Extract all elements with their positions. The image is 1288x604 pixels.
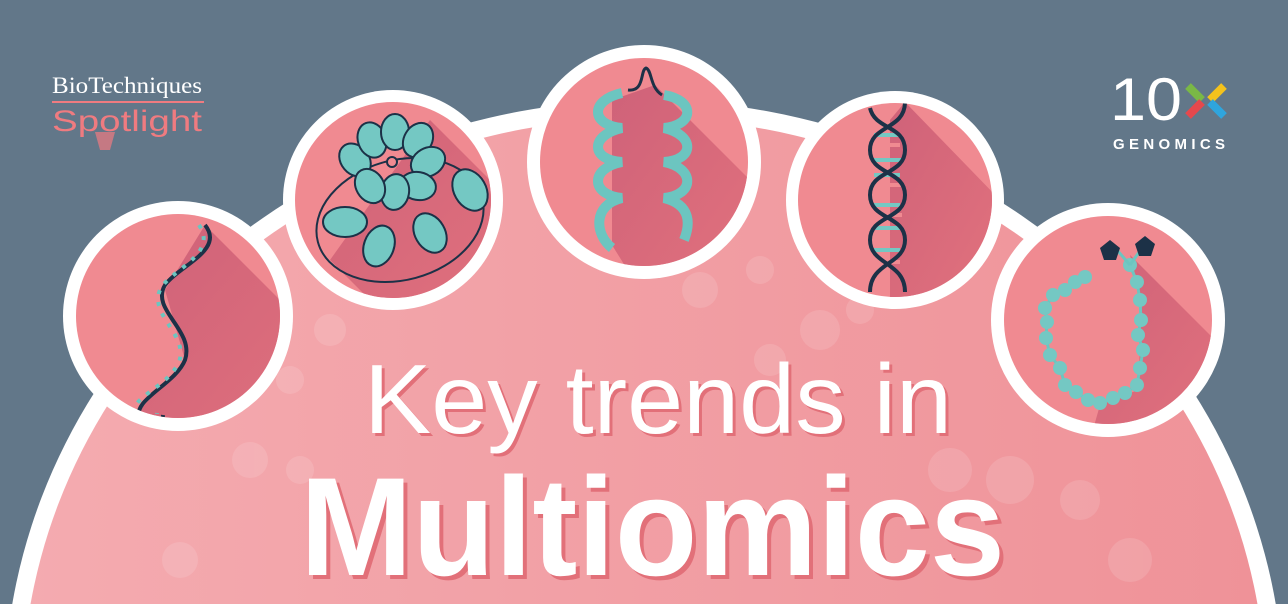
title: Key trends in: Key trends in (367, 347, 955, 457)
logo: BioTechniques Spotlight: Spotlight (52, 105, 203, 138)
logo: BioTechniques Spotlight (52, 73, 204, 150)
logo: 10x Genomics: 10 (1110, 66, 1182, 133)
title: Multiomics: Multiomics (300, 448, 1005, 604)
title: Key trends in: Key trends in (364, 344, 952, 454)
circle 3: protein helix (527, 45, 761, 290)
circle 4: DNA double helix (786, 91, 1004, 309)
circle 5: glycoprotein chain (991, 203, 1225, 440)
circle 1: single strand RNA (63, 201, 293, 431)
logo: 10x Genomics: GENOMICS (1113, 136, 1225, 153)
logo: BioTechniques Spotlight: BioTechniques (52, 73, 202, 98)
logo: 10x Genomics (1110, 66, 1225, 153)
circle 2: nucleosomes (283, 90, 503, 310)
